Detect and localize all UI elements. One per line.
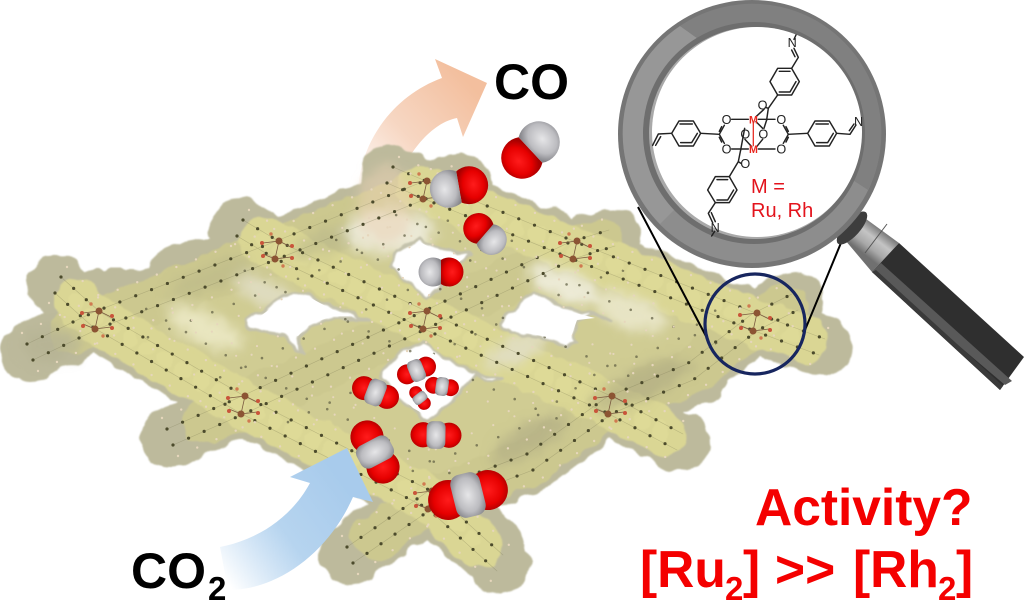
label: M = Ru, Rh: M = <box>751 176 785 198</box>
chemical structure: N <box>711 221 720 235</box>
comparison: >> <box>775 540 835 598</box>
framework: porous lattice <box>12 132 843 604</box>
chemical structure: O <box>740 157 750 171</box>
hole: right pore <box>500 292 610 347</box>
hole: upper pore <box>390 238 472 299</box>
metal labels <box>749 114 758 156</box>
ring right <box>808 121 837 146</box>
metal nodes <box>80 172 772 518</box>
hole: lower pore <box>382 343 503 420</box>
metal labels: M <box>749 114 758 126</box>
comparison: [Rh <box>853 540 939 598</box>
ring top <box>770 68 799 95</box>
magnifying glass <box>618 0 1024 390</box>
arrow: CO leaving (orange) <box>358 59 487 198</box>
chemical structure: O <box>776 143 786 157</box>
comparison: ] <box>956 540 973 598</box>
chemical structure: N <box>788 36 797 50</box>
bonds <box>653 125 724 145</box>
chemical structure: O <box>758 128 768 142</box>
label: M = Ru, Rh <box>751 176 813 222</box>
lens rim <box>618 0 886 268</box>
pore interiors kept clean <box>252 242 595 416</box>
molecules: CO <box>419 113 568 287</box>
chemical structure: O <box>722 143 732 157</box>
label: CO: CO <box>494 54 569 110</box>
chemical structure: O <box>758 99 768 113</box>
comparison: ] <box>743 540 760 598</box>
chemical structure: N <box>854 115 863 129</box>
molecules: CO2 <box>343 353 513 526</box>
handle <box>832 207 1024 390</box>
conclusion text <box>640 478 973 604</box>
label: CO2: CO <box>131 543 206 599</box>
ring left <box>672 121 701 146</box>
zoom circle on node <box>705 274 805 374</box>
heading: activity: Activity? <box>755 478 972 536</box>
chemical structure <box>653 35 863 236</box>
atoms: framework skeleton <box>20 156 830 582</box>
ring bottom <box>708 177 737 203</box>
chemical structure: O <box>740 128 750 142</box>
chemical structure: O <box>776 113 786 127</box>
comparison: [Ru <box>640 540 726 598</box>
metal labels: M <box>749 144 758 156</box>
hole: left pore <box>247 293 367 352</box>
arrow: CO2 entering (blue) <box>220 448 373 590</box>
oxygen labels: O <box>722 113 732 127</box>
zoom callout lines <box>638 207 843 340</box>
label: M = Ru, Rh: Ru, Rh <box>751 200 813 222</box>
